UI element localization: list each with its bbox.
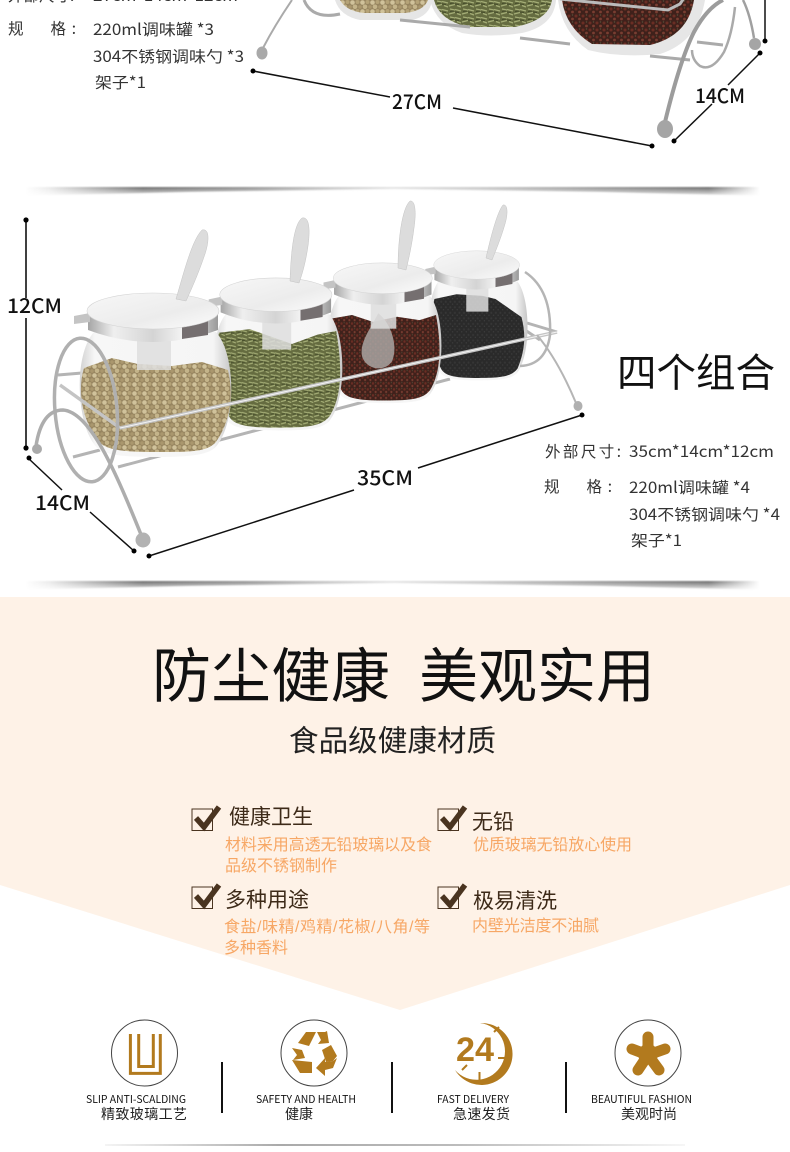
feature: easy to clean: 极易清洗	[473, 890, 557, 913]
label: beautiful fashion	[591, 1092, 692, 1122]
jar 2: green fennel	[209, 278, 342, 430]
label: safety and health: 健康	[285, 1106, 313, 1122]
spoon handle jar 4	[486, 205, 507, 260]
label: fast delivery: 急速发货	[453, 1106, 510, 1122]
spec text: four-jar set: 220ml调味罐 *4	[629, 476, 750, 498]
divider	[391, 1062, 393, 1113]
icon: 24 hour delivery	[455, 1023, 513, 1085]
icon: 24 hour delivery: 24	[456, 1031, 494, 1069]
jar 3: red pepper	[324, 263, 441, 403]
bottom divider shadow	[105, 1144, 685, 1146]
dimension: 14CM depth: 14CM	[35, 487, 90, 516]
dimension: 27CM width	[250, 68, 654, 148]
feature: health and hygiene	[192, 806, 432, 875]
feature: multiple uses: 多种用途	[225, 889, 309, 912]
spoon handle jar 2	[290, 218, 309, 283]
spec text: four-jar set	[544, 440, 780, 551]
label: glass craft	[86, 1092, 187, 1122]
top product: cropped three-jar rack	[256, 0, 761, 138]
feature: lead free	[438, 807, 632, 854]
feature: easy to clean: 内壁光洁度不油腻	[472, 916, 599, 935]
spec text: three-jar set: 304不锈钢调味勺 *3	[93, 45, 244, 67]
dimension: 14CM depth and height line	[672, 0, 768, 144]
spec text: four-jar set: 规 格:	[544, 475, 612, 497]
label: glass craft: 精致玻璃工艺	[101, 1106, 187, 1122]
dimension: 35CM width: 35CM	[357, 462, 413, 491]
panel: peach feature background	[0, 597, 790, 1010]
label: beautiful fashion: BEAUTIFUL FASHION	[591, 1092, 692, 1107]
rack rear rails	[58, 323, 557, 467]
main title: 防尘健康	[152, 644, 390, 710]
spoon handle jar 3	[398, 201, 415, 270]
divider shadow	[20, 581, 765, 591]
feature: multiple uses	[192, 885, 430, 957]
feature: multiple uses: 食盐/味精/鸡精/花椒/八角/等	[224, 918, 430, 936]
feature: lead free: 无铅	[472, 811, 514, 834]
feature: easy to clean	[438, 885, 599, 935]
divider shadow	[20, 187, 765, 197]
dimension: 14CM depth	[26, 456, 136, 554]
label: beautiful fashion: 美观时尚	[621, 1106, 677, 1122]
icon: beautiful fashion	[615, 1020, 681, 1086]
dimension: 35CM width	[146, 412, 584, 558]
main title	[152, 644, 655, 710]
feature: health and hygiene: 材料采用高透无铅玻璃以及食	[225, 836, 432, 854]
spec text: three-jar set	[8, 0, 244, 93]
icon: glass craft U	[112, 1020, 178, 1086]
main title: 美观实用	[419, 644, 655, 710]
dimension: 27CM width: 27CM	[392, 86, 442, 115]
divider	[565, 1062, 567, 1113]
heading: four-piece set: 四个组合	[617, 352, 775, 396]
icon: recycle health	[281, 1020, 347, 1086]
spec text: three-jar set: 220ml调味罐 *3	[93, 18, 214, 40]
spec text: four-jar set: 架子*1	[631, 529, 682, 551]
feature: health and hygiene: 品级不锈钢制作	[225, 857, 337, 875]
jar 4: dark spice	[425, 251, 528, 380]
label: fast delivery: FAST DELIVERY	[437, 1092, 509, 1107]
jar 1: white pepper	[74, 293, 231, 457]
feature: lead free: 优质玻璃无铅放心使用	[473, 836, 632, 854]
divider	[221, 1062, 223, 1113]
spec text: four-jar set: 35cm*14cm*12cm	[629, 440, 774, 462]
feature: multiple uses: 多种香料	[224, 939, 288, 957]
four-jar product on rack	[32, 201, 582, 547]
label: safety and health	[256, 1092, 356, 1122]
dimension: 12CM height: 12CM	[7, 290, 62, 319]
dimension: 12CM height	[7, 217, 62, 451]
spec text: three-jar set: 规 格:	[8, 17, 76, 39]
label: safety and health: SAFETY AND HEALTH	[256, 1092, 356, 1107]
subtitle: 食品级健康材质	[289, 725, 496, 758]
rack front rail and legs	[60, 332, 557, 428]
label: glass craft: SLIP ANTI-SCALDING	[86, 1092, 186, 1107]
spec text: three-jar set: 架子*1	[95, 71, 146, 93]
spoon handle jar 1	[176, 230, 208, 301]
spec text: four-jar set: 304不锈钢调味勺 *4	[629, 503, 780, 525]
dimension: 14CM depth and height line: 14CM	[695, 80, 745, 109]
label: fast delivery	[437, 1092, 510, 1122]
spec text: four-jar set: 外部尺寸:	[545, 440, 621, 462]
feature: health and hygiene: 健康卫生	[229, 806, 313, 829]
